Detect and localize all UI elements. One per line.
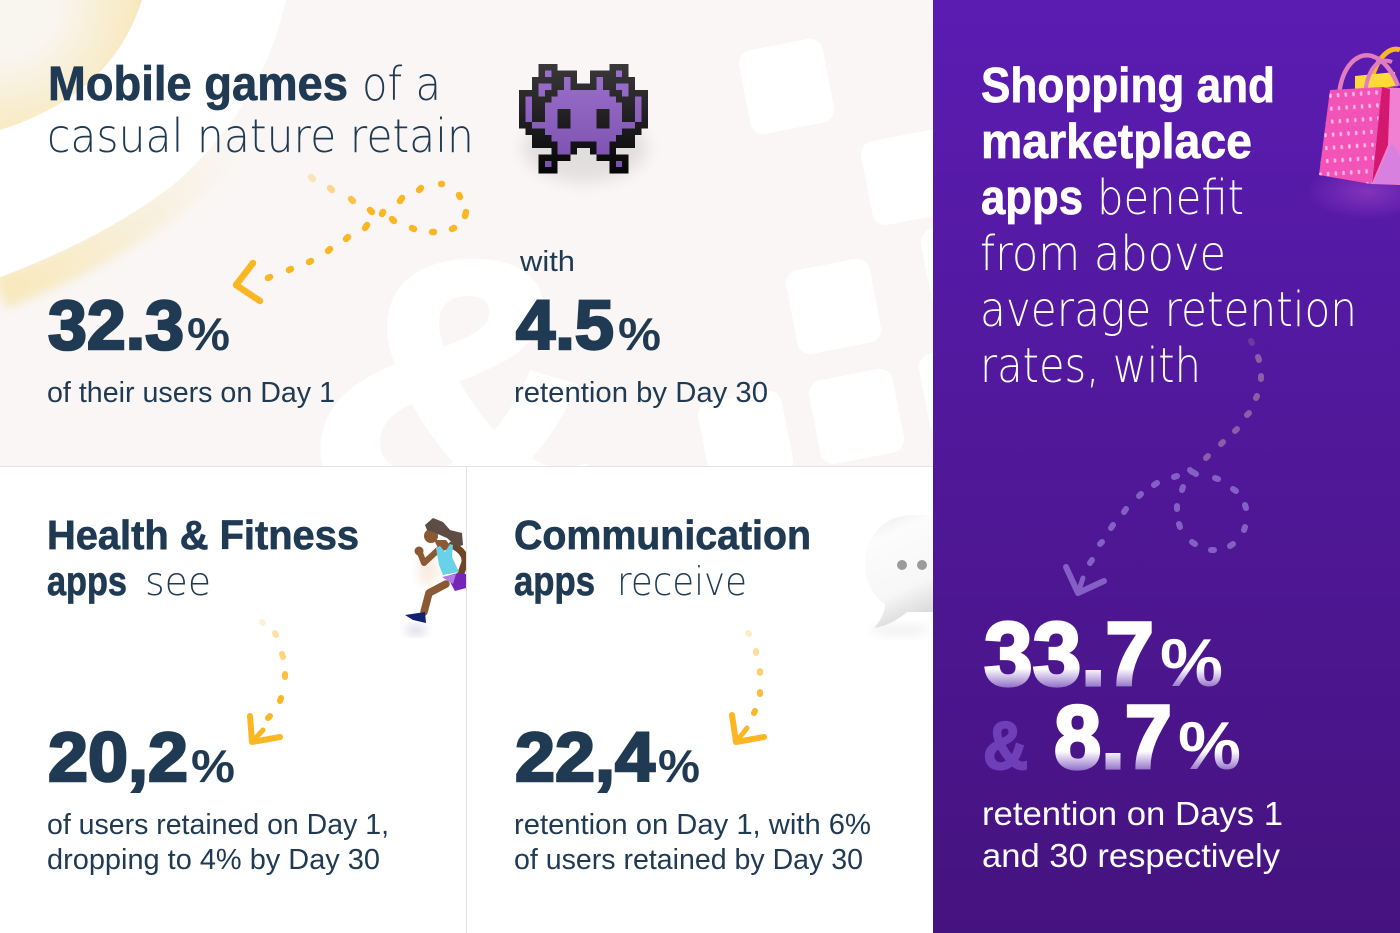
- heading: mobile games: casual nature retain: [47, 109, 474, 163]
- text: communication description: [514, 809, 871, 876]
- text: health description: dropping to 4% by Day 30: [47, 844, 380, 876]
- stat: 33.7%: 33.7: [984, 605, 1154, 705]
- stat: 8.7%: 8.7: [1054, 688, 1172, 788]
- heading: communication: receive: [617, 560, 747, 605]
- stat: 4.5% by day 30: 4.5: [516, 286, 614, 364]
- stat: 8.7%: [983, 688, 1241, 788]
- panel: shopping and marketplace: [933, 0, 1400, 933]
- stat: 20,2%: 20,2: [48, 718, 188, 796]
- stat: 20,2%: %: [191, 740, 235, 792]
- heading: shopping and marketplace: average retention: [980, 282, 1357, 338]
- stat: 4.5% by day 30: [514, 246, 768, 409]
- stat: 22,4%: 22,4: [515, 718, 655, 796]
- heading: shopping and marketplace: [980, 59, 1357, 394]
- icon: alien monster: [519, 64, 648, 182]
- text: health description: of users retained on Day 1,: [47, 809, 389, 841]
- heading: communication: apps: [514, 558, 595, 604]
- heading: mobile games: Mobile games: [48, 58, 348, 111]
- panel: mobile games: [0, 0, 933, 466]
- stat: 4.5% by day 30: retention by Day 30: [514, 377, 768, 409]
- text: communication description: retention on Day 1, with 6%: [514, 809, 871, 841]
- heading: mobile games: of a: [362, 57, 441, 111]
- text: shopping description: retention on Days 1: [982, 795, 1283, 832]
- arrow: communication dotted arrow: [732, 633, 764, 742]
- stat: 32.3% on day 1: of their users on Day 1: [47, 377, 335, 409]
- text: health description: [47, 809, 389, 876]
- text: communication description: of users retained by Day 30: [514, 844, 863, 876]
- icon: shopping bag: [1318, 46, 1400, 214]
- stat: 22,4%: %: [658, 740, 700, 792]
- arrow: health dotted arrow: [250, 622, 285, 742]
- stat: 32.3% on day 1: %: [187, 308, 230, 360]
- panel: mobile games: &: [291, 189, 629, 580]
- stat: 4.5% by day 30: %: [618, 308, 661, 360]
- icon: speech bubble: [874, 515, 933, 634]
- icon: running woman: [405, 518, 466, 635]
- panel: communication: [514, 515, 933, 875]
- heading: health and fitness: see: [145, 560, 211, 605]
- heading: communication: Communication: [514, 512, 811, 558]
- heading: health and fitness: [47, 512, 359, 605]
- stat: 32.3% on day 1: 32.3: [48, 286, 184, 364]
- stat: 4.5% by day 30: with: [519, 246, 575, 278]
- arrow: purple looped dotted arrow: [1066, 341, 1261, 593]
- arrow: yellow looped dotted arrow: [236, 177, 466, 301]
- heading: shopping and marketplace: from above: [980, 226, 1226, 282]
- heading: shopping and marketplace: marketplace: [981, 115, 1252, 169]
- heading: mobile games: [47, 57, 474, 163]
- heading: shopping and marketplace: benefit: [1097, 170, 1244, 226]
- stat: 33.7%: %: [1160, 625, 1223, 701]
- heading: health and fitness: Health & Fitness: [47, 512, 359, 558]
- text: shopping description: [982, 795, 1283, 874]
- heading: shopping and marketplace: Shopping and: [981, 59, 1275, 113]
- heading: communication: [514, 512, 811, 605]
- text: shopping description: and 30 respectively: [982, 837, 1281, 874]
- heading: shopping and marketplace: apps: [981, 171, 1083, 225]
- panel: health and fitness: [48, 518, 466, 875]
- stat: 32.3% on day 1: [47, 286, 335, 409]
- heading: health and fitness: apps: [47, 558, 127, 604]
- heading: shopping and marketplace: rates, with: [980, 338, 1201, 394]
- stat: 8.7%: %: [1178, 708, 1241, 784]
- stat: 8.7%: &: [983, 708, 1028, 784]
